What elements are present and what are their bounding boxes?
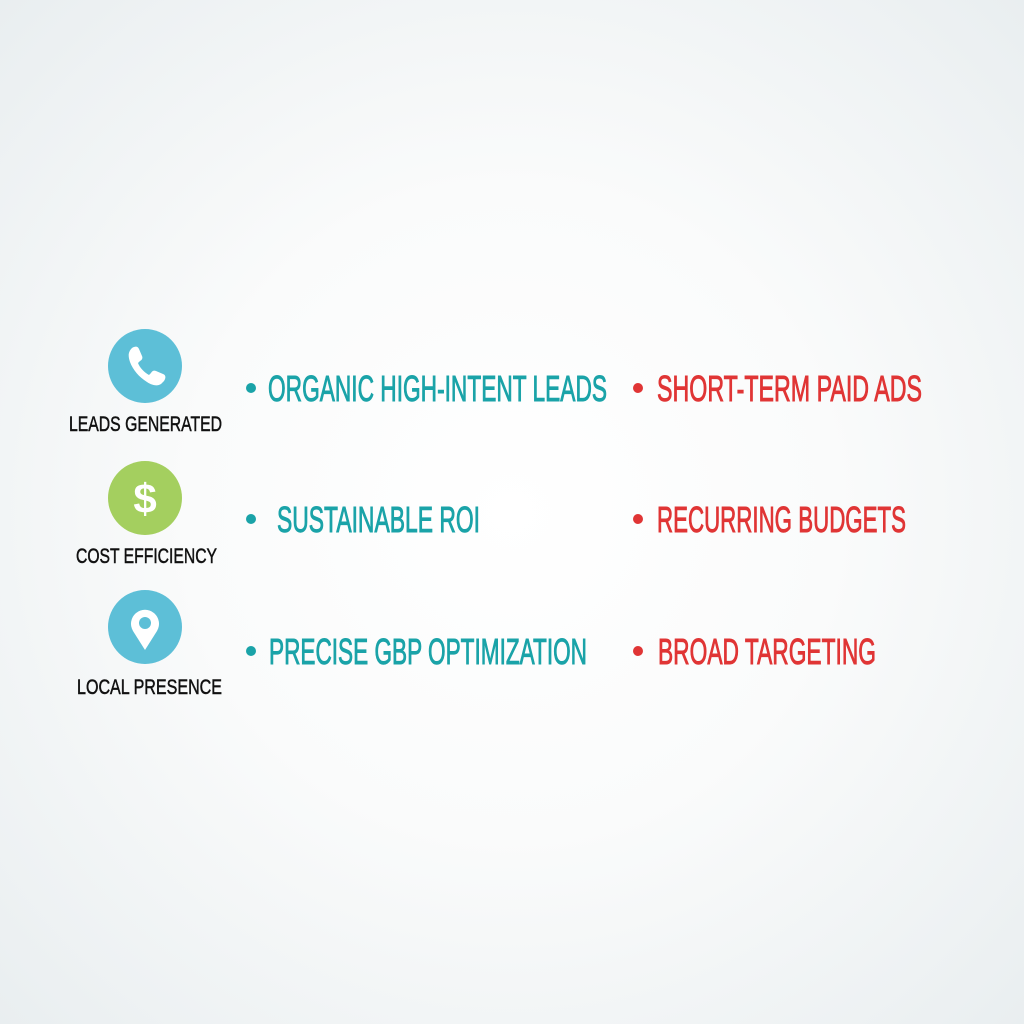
row: cost efficiency <box>76 461 906 568</box>
row: leads generated <box>69 329 922 436</box>
bullet: organic high-intent leads <box>246 368 607 409</box>
bullet: recurring budgets <box>633 499 906 540</box>
label: cost efficiency: COST EFFICIENCY <box>76 545 217 568</box>
bullet: sustainable roi <box>246 499 480 540</box>
row: local presence <box>77 590 876 699</box>
icon: dollar <box>108 461 182 535</box>
bullet: sustainable roi: SUSTAINABLE ROI <box>277 499 480 540</box>
icon: dollar: $ <box>133 475 157 522</box>
bullet: precise gbp optimization: PRECISE GBP OPTIMIZATION <box>269 631 587 672</box>
bullet: organic high-intent leads: ORGANIC HIGH-INTENT LEADS <box>268 368 607 409</box>
bullet: short-term paid ads <box>633 368 922 409</box>
icon: phone <box>108 329 182 403</box>
bullet: broad targeting: BROAD TARGETING <box>658 631 876 672</box>
label: leads generated: LEADS GENERATED <box>69 413 222 436</box>
bullet: precise gbp optimization <box>246 631 587 672</box>
icon: location pin <box>108 590 182 664</box>
label: local presence: LOCAL PRESENCE <box>77 676 222 699</box>
bullet: broad targeting <box>633 631 876 672</box>
